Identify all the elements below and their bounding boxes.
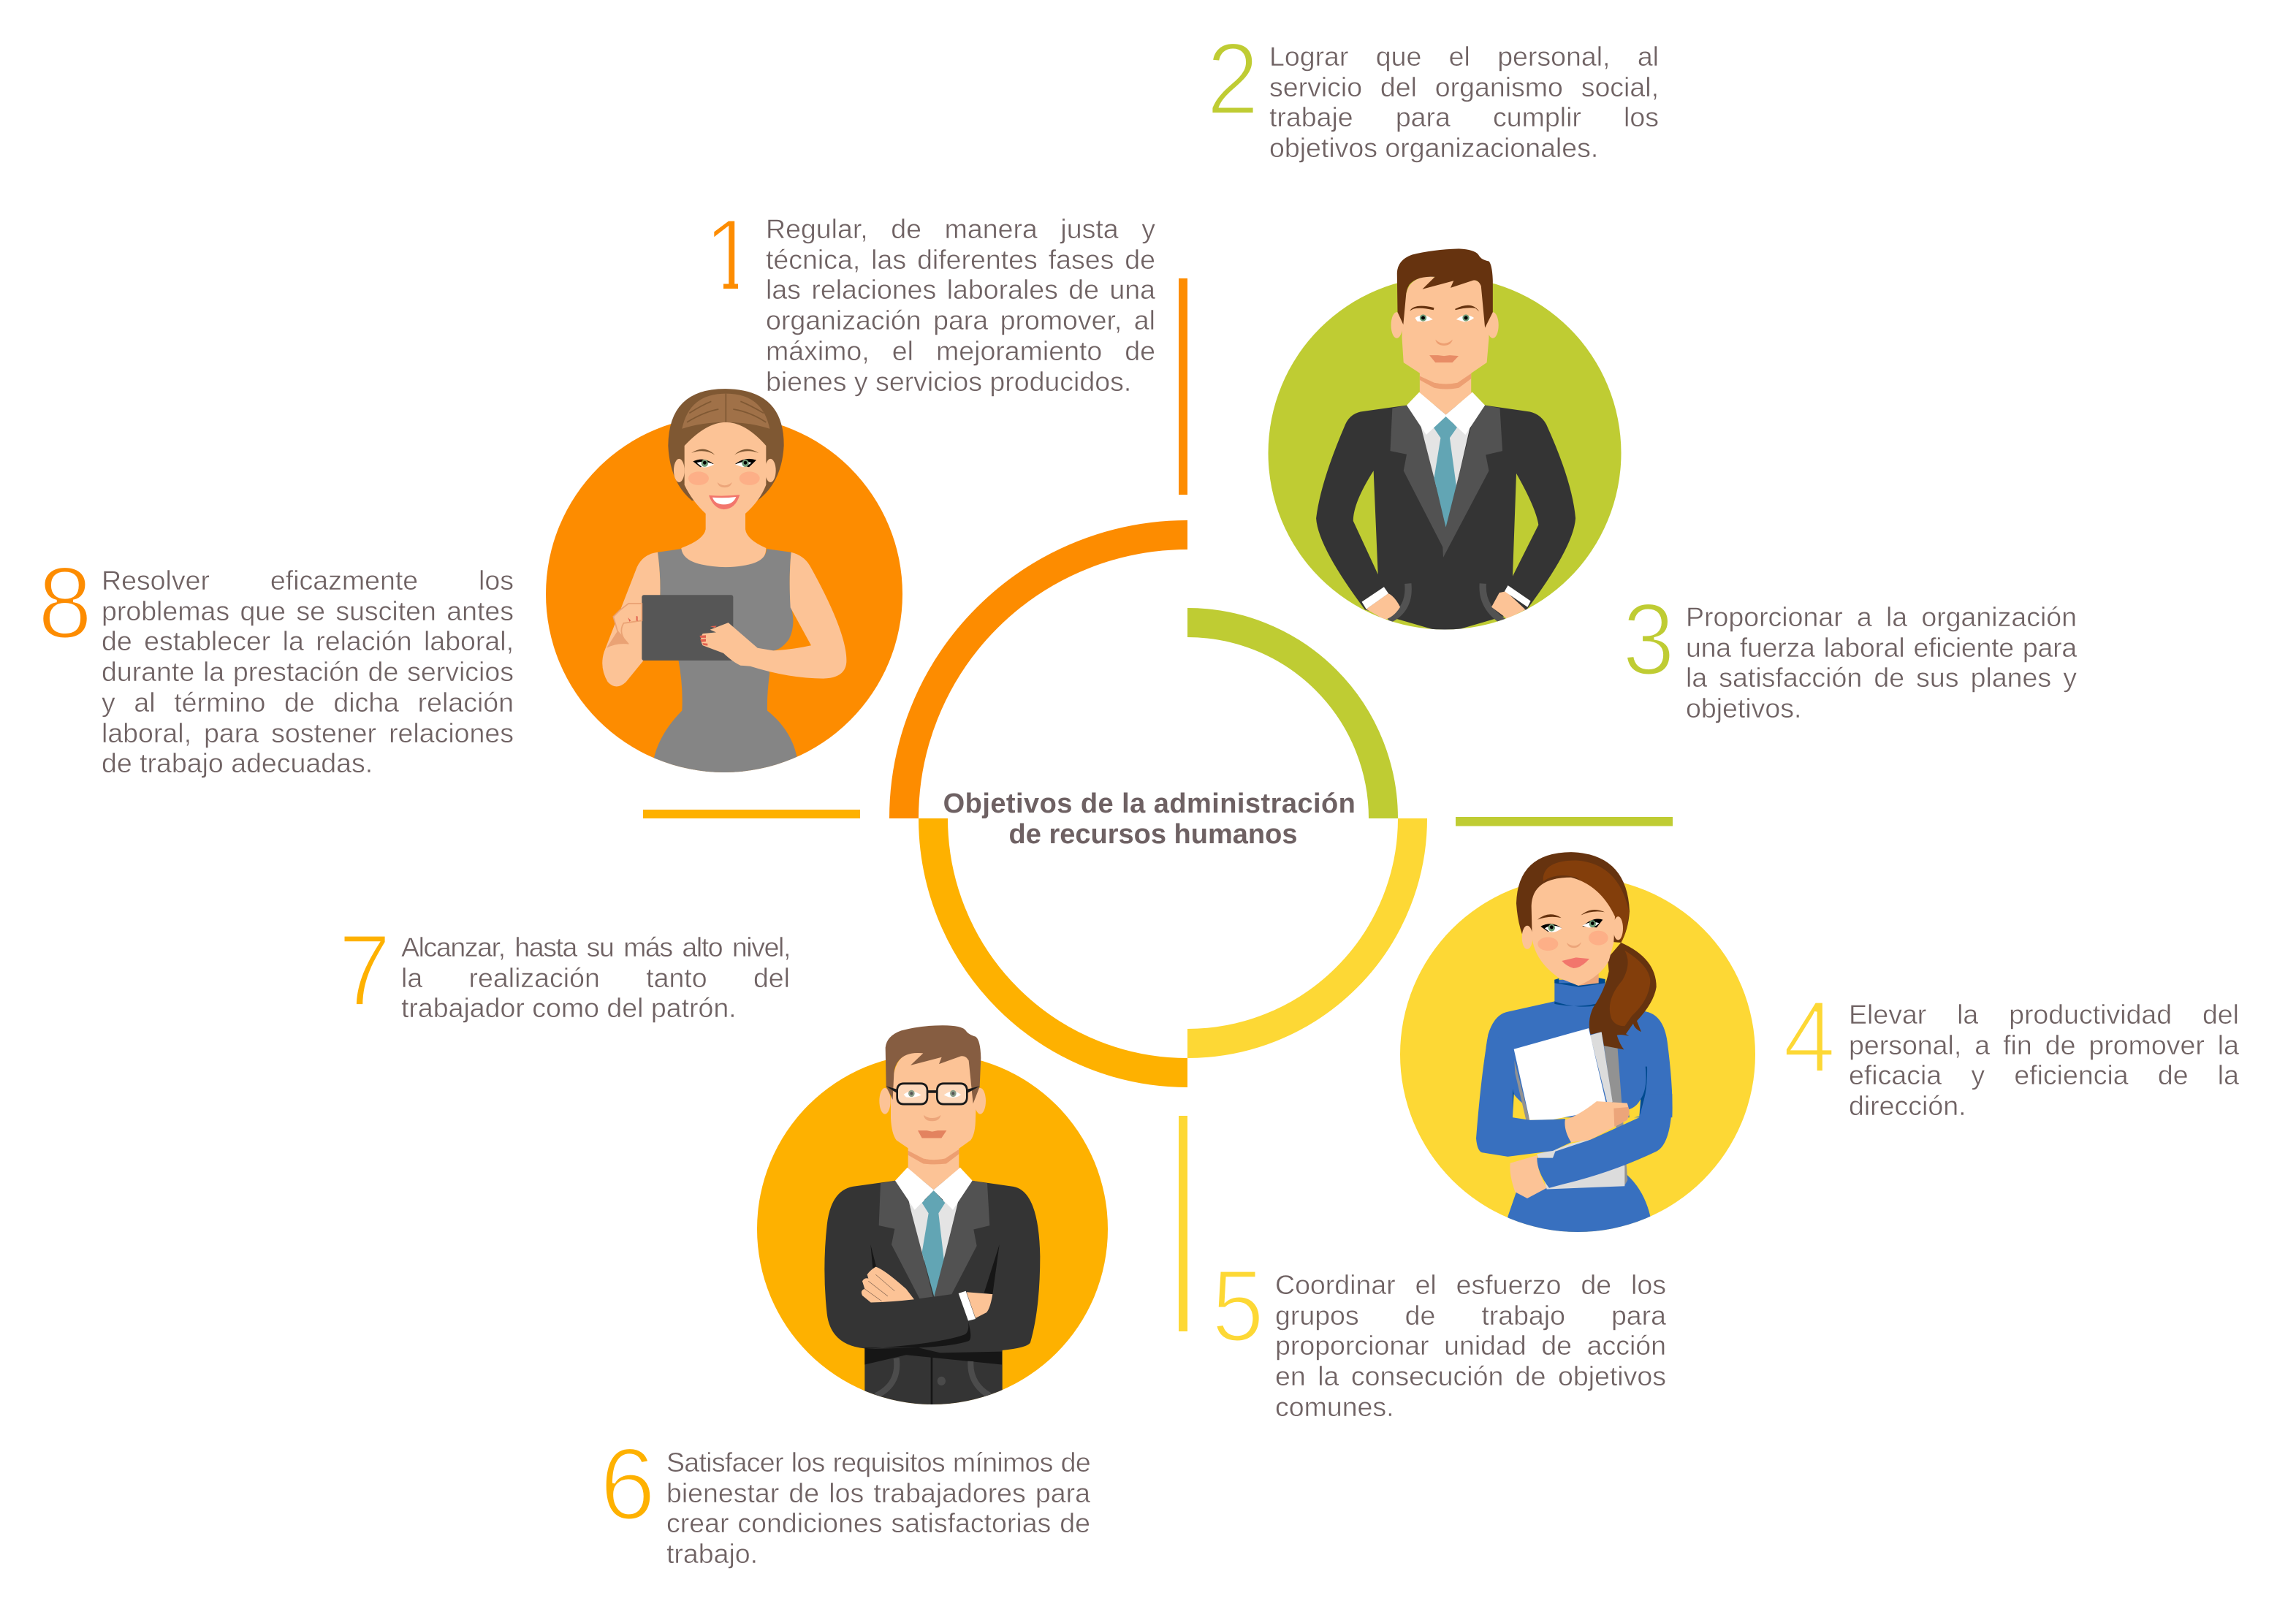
text block 2: Lograr que el personal, al	[1269, 41, 1659, 72]
number 7: 7	[338, 913, 391, 1027]
central ring: green arc	[1187, 623, 1383, 818]
text block 5: en la consecución de objetivos	[1275, 1361, 1666, 1391]
text block 5: Coordinar el esfuerzo de los	[1275, 1269, 1666, 1300]
text block 6: bienestar de los trabajadores para	[666, 1478, 1090, 1508]
text block 4: eficacia y eficiencia de la	[1849, 1060, 2239, 1090]
yellow circle	[1400, 877, 1755, 1232]
text block 2	[1269, 41, 1659, 163]
central ring: yellow arc	[1187, 818, 1413, 1043]
text block 1: organización para promover, al	[766, 305, 1155, 335]
number 3: 3	[1622, 582, 1675, 696]
central title	[943, 788, 1356, 850]
central ring: amber arc	[933, 818, 1187, 1073]
text block 2: objetivos organizacionales.	[1269, 132, 1598, 163]
green horizontal bar	[1456, 817, 1673, 826]
text block 8: problemas que se susciten antes	[102, 596, 514, 626]
text block 1: Regular, de manera justa y	[766, 213, 1155, 244]
text block 7: la realización tanto del	[401, 962, 790, 993]
text block 6: trabajo.	[666, 1538, 758, 1569]
text block 1: máximo, el mejoramiento de	[766, 335, 1155, 366]
text block 2: trabaje para cumplir los	[1269, 102, 1659, 132]
amber horizontal bar	[643, 810, 860, 818]
character: woman in grey dress with tablet	[602, 389, 846, 780]
amber circle	[757, 1054, 1108, 1404]
text block 8: y al término de dicha relación	[102, 687, 514, 718]
text block 4	[1849, 999, 2239, 1121]
text block 5: comunes.	[1275, 1391, 1394, 1422]
character: man in dark suit, hands on hips	[1316, 248, 1575, 633]
text block 4: personal, a fin de promover la	[1849, 1030, 2239, 1060]
central title: Objetivos de la administración	[943, 788, 1356, 819]
text block 7: Alcanzar, hasta su más alto nivel,	[401, 932, 790, 962]
text block 5: grupos de trabajo para	[1275, 1300, 1666, 1331]
orange vertical bar	[1179, 278, 1187, 495]
character: man with glasses and crossed arms	[824, 1025, 1040, 1415]
number 4: 4	[1783, 979, 1836, 1094]
text block 8	[102, 566, 514, 779]
text block 1: las relaciones laborales de una	[766, 274, 1155, 305]
number 1: 1	[704, 197, 756, 312]
text block 3	[1686, 601, 2077, 723]
text block 2: servicio del organismo social,	[1269, 72, 1659, 102]
text block 6: Satisfacer los requisitos mínimos de	[666, 1447, 1090, 1478]
text block 3: la satisfacción de sus planes y	[1686, 662, 2077, 693]
number 6: 6	[600, 1428, 655, 1541]
text block 4: dirección.	[1849, 1090, 1966, 1121]
text block 1: bienes y servicios producidos.	[766, 366, 1131, 397]
number 5: 5	[1212, 1248, 1264, 1363]
central ring: orange arc	[904, 535, 1187, 818]
green circle	[1269, 276, 1621, 630]
central title: de recursos humanos	[1009, 819, 1297, 850]
text block 5	[1275, 1269, 1666, 1422]
text block 8: durante la prestación de servicios	[102, 656, 514, 687]
number 8: 8	[38, 547, 92, 661]
text block 3: Proporcionar a la organización	[1686, 601, 2077, 632]
text block 7	[401, 932, 790, 1023]
text block 8: laboral, para sostener relaciones	[102, 718, 514, 748]
text block 8: de trabajo adecuadas.	[102, 748, 373, 778]
text block 4: Elevar la productividad del	[1849, 999, 2239, 1030]
infographic artwork	[43, 44, 1831, 1518]
text block 8: de establecer la relación laboral,	[102, 625, 514, 656]
text block 3: objetivos.	[1686, 693, 1801, 723]
character: woman in blue sweater holding folders	[1476, 852, 1673, 1240]
number 2: 2	[1206, 21, 1259, 136]
text block 5: proporcionar unidad de acción	[1275, 1330, 1666, 1361]
orange circle	[546, 416, 902, 772]
text block 1: técnica, las diferentes fases de	[766, 244, 1155, 275]
yellow vertical bar	[1179, 1116, 1187, 1331]
text block 7: trabajador como del patrón.	[401, 992, 737, 1023]
text block 6	[666, 1447, 1090, 1569]
text block 3: una fuerza laboral eficiente para	[1686, 632, 2077, 663]
text block 8: Resolver eficazmente los	[102, 565, 514, 596]
text block 1	[766, 213, 1155, 397]
text block 6: crear condiciones satisfactorias de	[666, 1507, 1090, 1538]
